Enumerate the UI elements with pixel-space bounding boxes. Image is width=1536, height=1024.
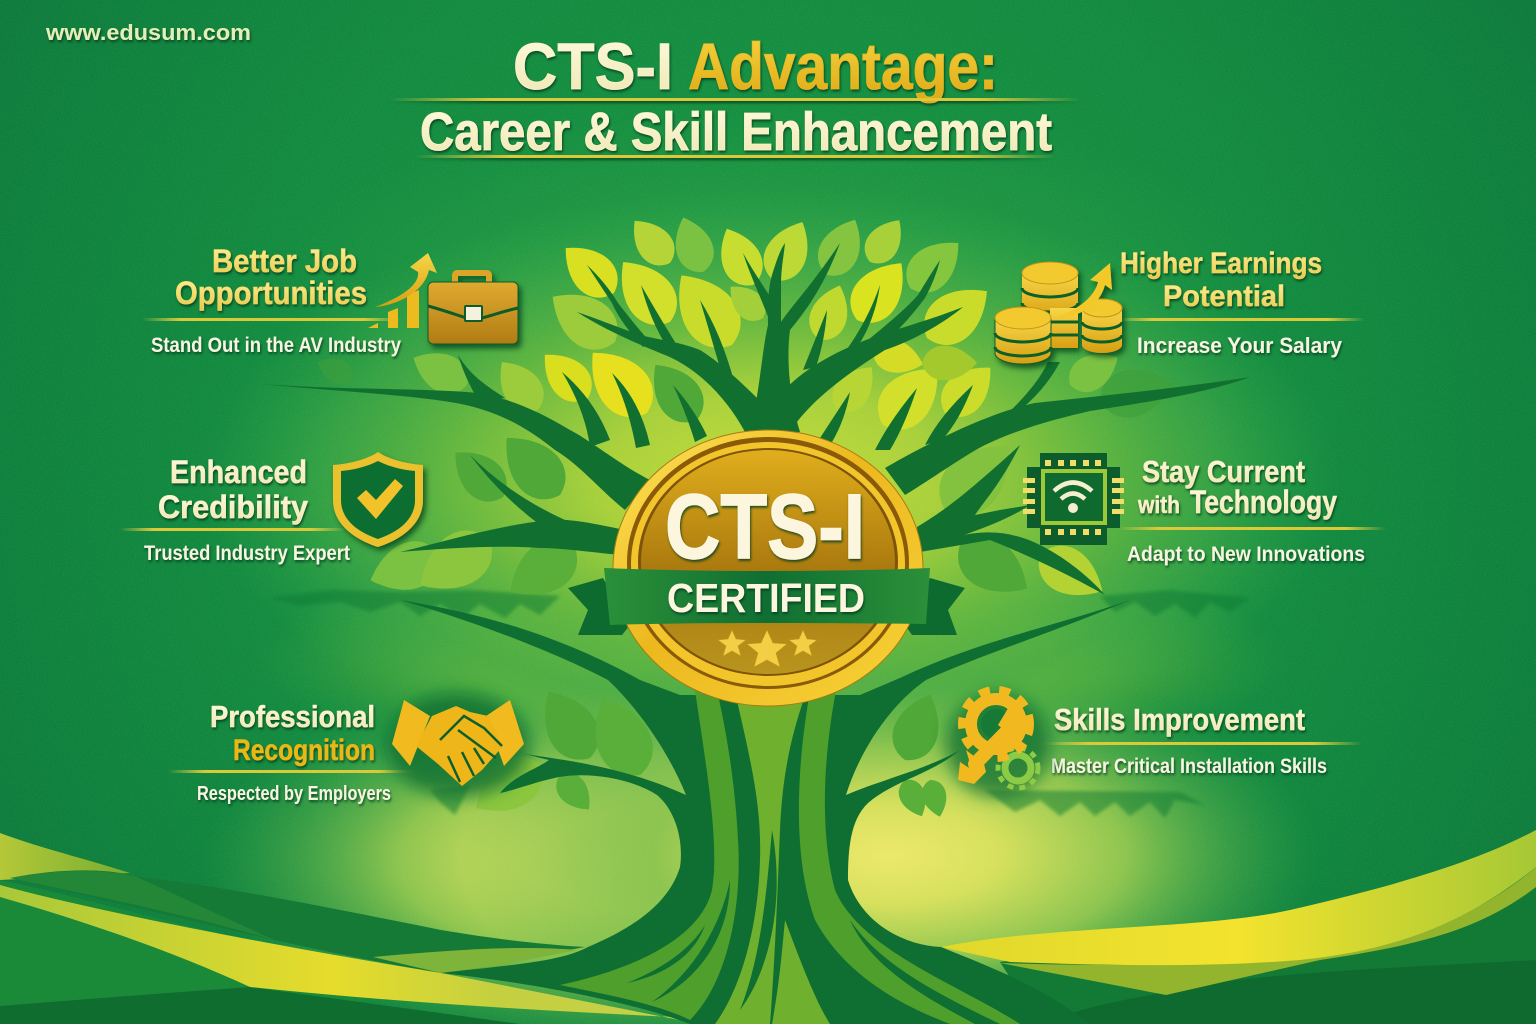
trunk highlights <box>559 670 1020 1024</box>
subtext: Stand Out in the AV Industry <box>151 334 401 357</box>
ribbon <box>604 568 930 625</box>
subtext: Increase Your Salary <box>1137 333 1343 358</box>
heading: Recognition <box>233 734 375 767</box>
medal face <box>641 450 895 674</box>
tree <box>260 210 1250 1024</box>
icon: coin stacks <box>995 262 1122 364</box>
heading: with <box>1137 492 1180 519</box>
item: enhanced credibility <box>120 452 423 565</box>
title <box>390 29 1080 162</box>
item: stay current with technology <box>1023 453 1386 566</box>
foliage shadows <box>270 590 1250 818</box>
medal <box>568 430 965 706</box>
heading <box>158 454 308 525</box>
title: Career & Skill Enhancement <box>420 102 1052 162</box>
medal rim <box>613 430 923 706</box>
item: professional recognition <box>168 693 530 805</box>
subtext: Adapt to New Innovations <box>1127 543 1365 566</box>
trunk <box>400 600 1130 1024</box>
heading: Potential <box>1163 280 1285 313</box>
icon: handshake <box>386 693 530 797</box>
website url: www.edusum.com <box>45 20 251 45</box>
branches <box>260 243 1250 595</box>
subtext: Trusted Industry Expert <box>144 542 350 565</box>
heading: Higher Earnings <box>1120 247 1322 280</box>
icon: briefcase <box>428 270 518 344</box>
bottom waves <box>0 830 1536 1024</box>
item: better job opportunities <box>142 243 518 357</box>
heading: Stay Current <box>1142 454 1305 489</box>
heading: Professional <box>210 699 375 734</box>
leaves: upper crown <box>531 210 1005 442</box>
heading: Skills Improvement <box>1054 702 1305 737</box>
icon: chip with wifi <box>1023 453 1124 545</box>
medal title: CTS-I <box>665 476 865 578</box>
item: higher earnings potential <box>995 247 1365 364</box>
item: skills improvement <box>946 690 1362 797</box>
subtext: Master Critical Installation Skills <box>1051 755 1327 778</box>
title: Advantage: <box>688 29 998 103</box>
leaves: side and lower <box>312 341 1178 828</box>
heading: Opportunities <box>175 275 367 311</box>
heading: Enhanced <box>170 454 307 490</box>
icon: gear and wrench <box>946 690 1050 797</box>
heading <box>1120 247 1322 313</box>
certified label: CERTIFIED <box>667 575 865 621</box>
heading: Better Job <box>212 243 357 279</box>
title: CTS-I <box>513 29 673 103</box>
heading <box>210 699 375 767</box>
stars <box>718 630 817 667</box>
subtext: Respected by Employers <box>197 783 391 805</box>
heading: Credibility <box>158 489 308 525</box>
heading: Technology <box>1190 484 1337 520</box>
heading <box>1137 454 1337 520</box>
icon: shield with check <box>333 452 423 547</box>
ribbon tails <box>568 578 965 635</box>
icon: growth arrow and bars <box>368 253 437 328</box>
heading <box>175 243 367 311</box>
